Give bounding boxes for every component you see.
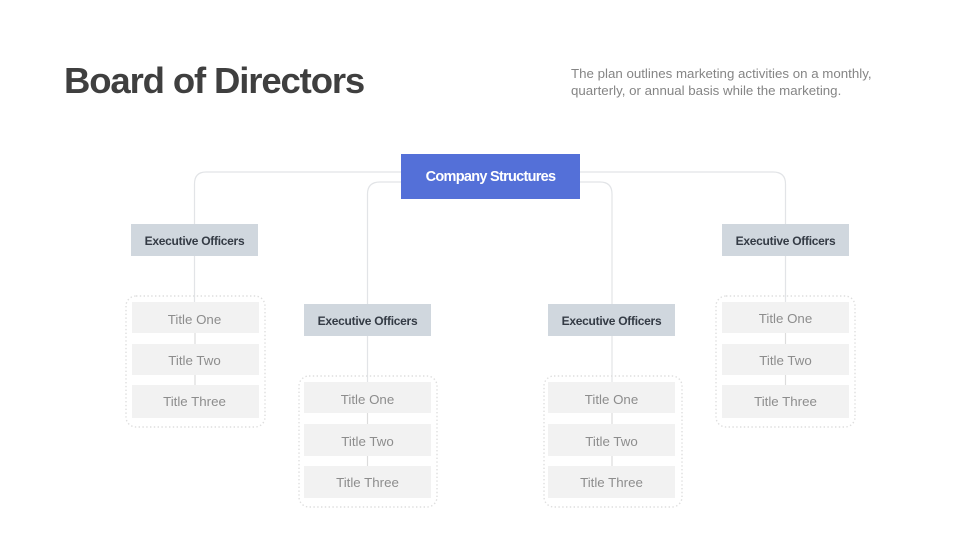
dotted group 4 xyxy=(715,295,856,428)
executive box 2: Executive Officers xyxy=(318,314,417,328)
item: title one xyxy=(722,302,849,333)
executive box 1 xyxy=(131,224,258,256)
branch 1 xyxy=(125,224,266,428)
branch 3 xyxy=(543,304,683,508)
dotted group 2 xyxy=(298,375,438,508)
item: title three xyxy=(548,466,675,498)
item: title two xyxy=(722,344,849,375)
item: title two: Title Two xyxy=(168,353,221,368)
branch 4 xyxy=(715,224,856,428)
executive box 3: Executive Officers xyxy=(562,314,661,328)
item: title one xyxy=(304,382,431,413)
executive box 3 xyxy=(548,304,675,336)
item: title three: Title Three xyxy=(336,475,399,490)
item: title three xyxy=(132,385,259,418)
item: title three: Title Three xyxy=(580,475,643,490)
root box: company structures: Company Structures xyxy=(426,169,555,185)
executive box 4: Executive Officers xyxy=(736,234,835,248)
executive box 4 xyxy=(722,224,849,256)
executive box 2 xyxy=(304,304,431,336)
description text xyxy=(571,66,872,98)
item: title three: Title Three xyxy=(754,394,817,409)
item: title three xyxy=(722,385,849,418)
branch 2 xyxy=(298,304,438,508)
executive box 1: Executive Officers xyxy=(145,234,244,248)
description text: quarterly, or annual basis while the marketing. xyxy=(571,83,841,98)
item: title two: Title Two xyxy=(585,434,638,449)
item: title two: Title Two xyxy=(341,434,394,449)
item: title three: Title Three xyxy=(163,394,226,409)
root box: company structures xyxy=(401,154,580,199)
description text: The plan outlines marketing activities on a monthly, xyxy=(571,66,872,81)
dotted group 1 xyxy=(125,295,266,428)
dotted group 3 xyxy=(543,375,683,508)
item: title one: Title One xyxy=(168,312,221,327)
item: title one xyxy=(132,302,259,333)
item: title one: Title One xyxy=(759,311,812,326)
item: title one: Title One xyxy=(585,392,638,407)
item: title two xyxy=(548,424,675,456)
item: title three xyxy=(304,466,431,498)
item: title two xyxy=(132,344,259,375)
item: title two xyxy=(304,424,431,456)
title: Board of Directors xyxy=(64,60,364,101)
item: title two: Title Two xyxy=(759,353,812,368)
item: title one xyxy=(548,382,675,413)
item: title one: Title One xyxy=(341,392,394,407)
